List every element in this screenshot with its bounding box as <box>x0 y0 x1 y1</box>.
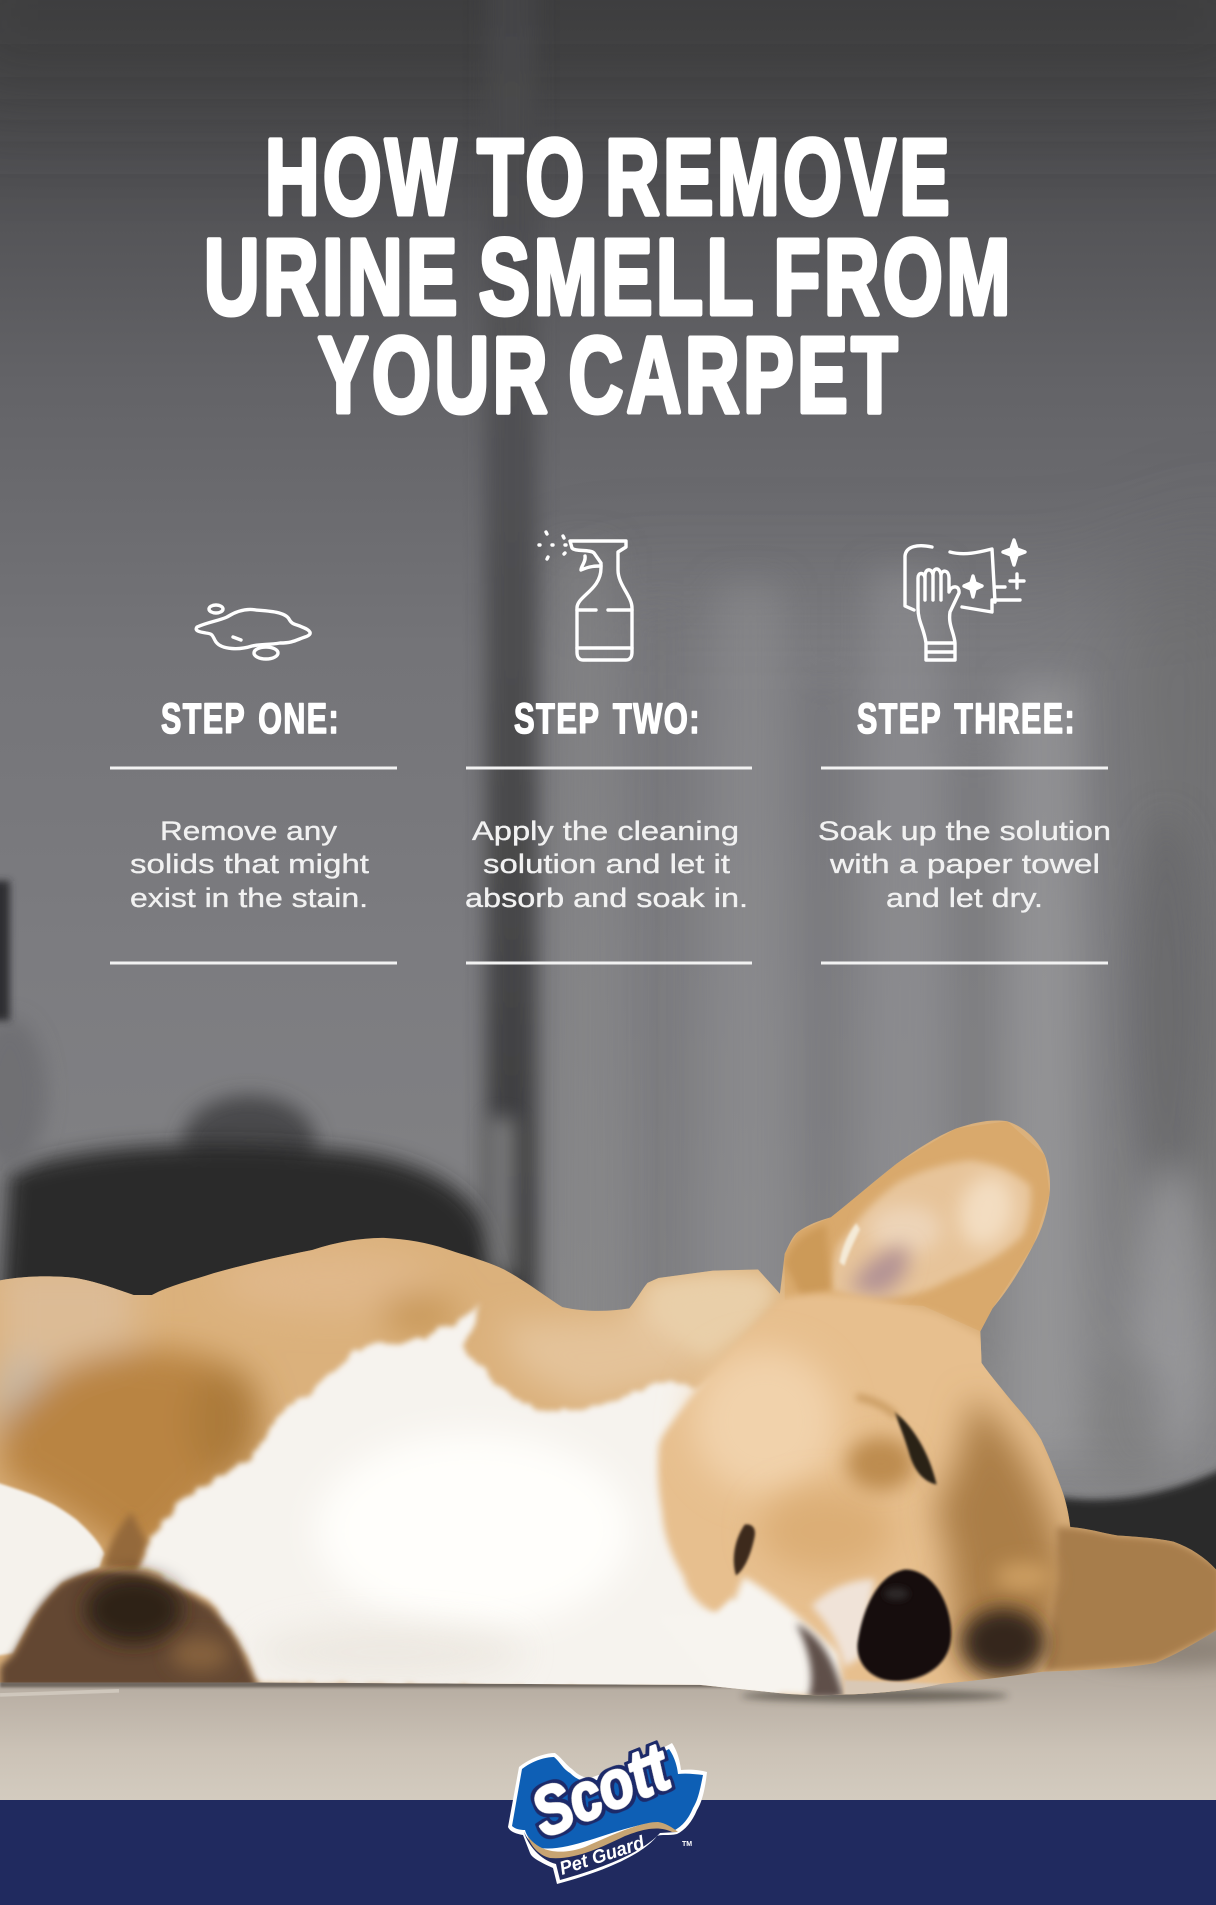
text: step one description: solids that might <box>130 849 370 879</box>
neck fur <box>644 1276 780 1361</box>
back ear <box>1045 1527 1216 1672</box>
dark sofa <box>0 1145 510 1324</box>
text: step three description: with a paper towel <box>829 849 1100 879</box>
floor <box>0 1625 1216 1804</box>
blurred vase <box>0 1018 46 1169</box>
text: step three description: and let dry. <box>886 883 1043 913</box>
text: step three description <box>818 816 1111 913</box>
text: step two description: Apply the cleaning <box>472 816 739 846</box>
curtain dark vertical strip <box>486 0 537 1336</box>
title <box>204 116 1014 435</box>
icon: gloved hand wiping <box>905 540 1025 660</box>
heading: step three: STEP THREE: <box>857 695 1076 743</box>
ear <box>785 1121 1050 1331</box>
text: step two description <box>465 816 748 913</box>
logo: Scott Pet Guard <box>508 1728 707 1884</box>
text: step two description: solution and let it <box>483 849 731 879</box>
heading: step one: STEP ONE: <box>161 695 340 743</box>
dog <box>0 1093 1216 1701</box>
icon: puddle <box>196 605 310 659</box>
right side dark furniture <box>1057 1464 1216 1640</box>
panel: step one <box>110 605 397 964</box>
panel: step two <box>465 532 752 964</box>
dark hind leg <box>0 1571 259 1689</box>
white patch <box>0 1480 104 1657</box>
panel: step three <box>818 540 1111 964</box>
blurred lump behind sofa <box>182 1096 316 1188</box>
eye <box>894 1412 937 1484</box>
muzzle <box>709 1574 846 1696</box>
text: step one description: exist in the stain. <box>130 883 368 913</box>
head <box>658 1294 1075 1698</box>
logo: Scott Pet Guard: TM <box>682 1841 692 1848</box>
text: step one description: Remove any <box>160 816 338 846</box>
mouth <box>734 1524 755 1576</box>
heading: step two: STEP TWO: <box>514 695 701 743</box>
text: step one description <box>130 816 370 913</box>
icon: spray bottle <box>539 532 632 660</box>
nose <box>857 1570 951 1681</box>
wordmark: Scott: Scott <box>521 1728 681 1852</box>
text: step two description: absorb and soak in. <box>465 883 748 913</box>
title: YOUR CARPET <box>318 314 901 435</box>
fur colour zones <box>0 1250 765 1567</box>
wordmark: Pet Guard: Pet Guard <box>557 1832 648 1880</box>
text: step three description: Soak up the solution <box>818 816 1111 846</box>
white chest <box>138 1303 779 1695</box>
footer bar <box>0 1800 1216 1905</box>
